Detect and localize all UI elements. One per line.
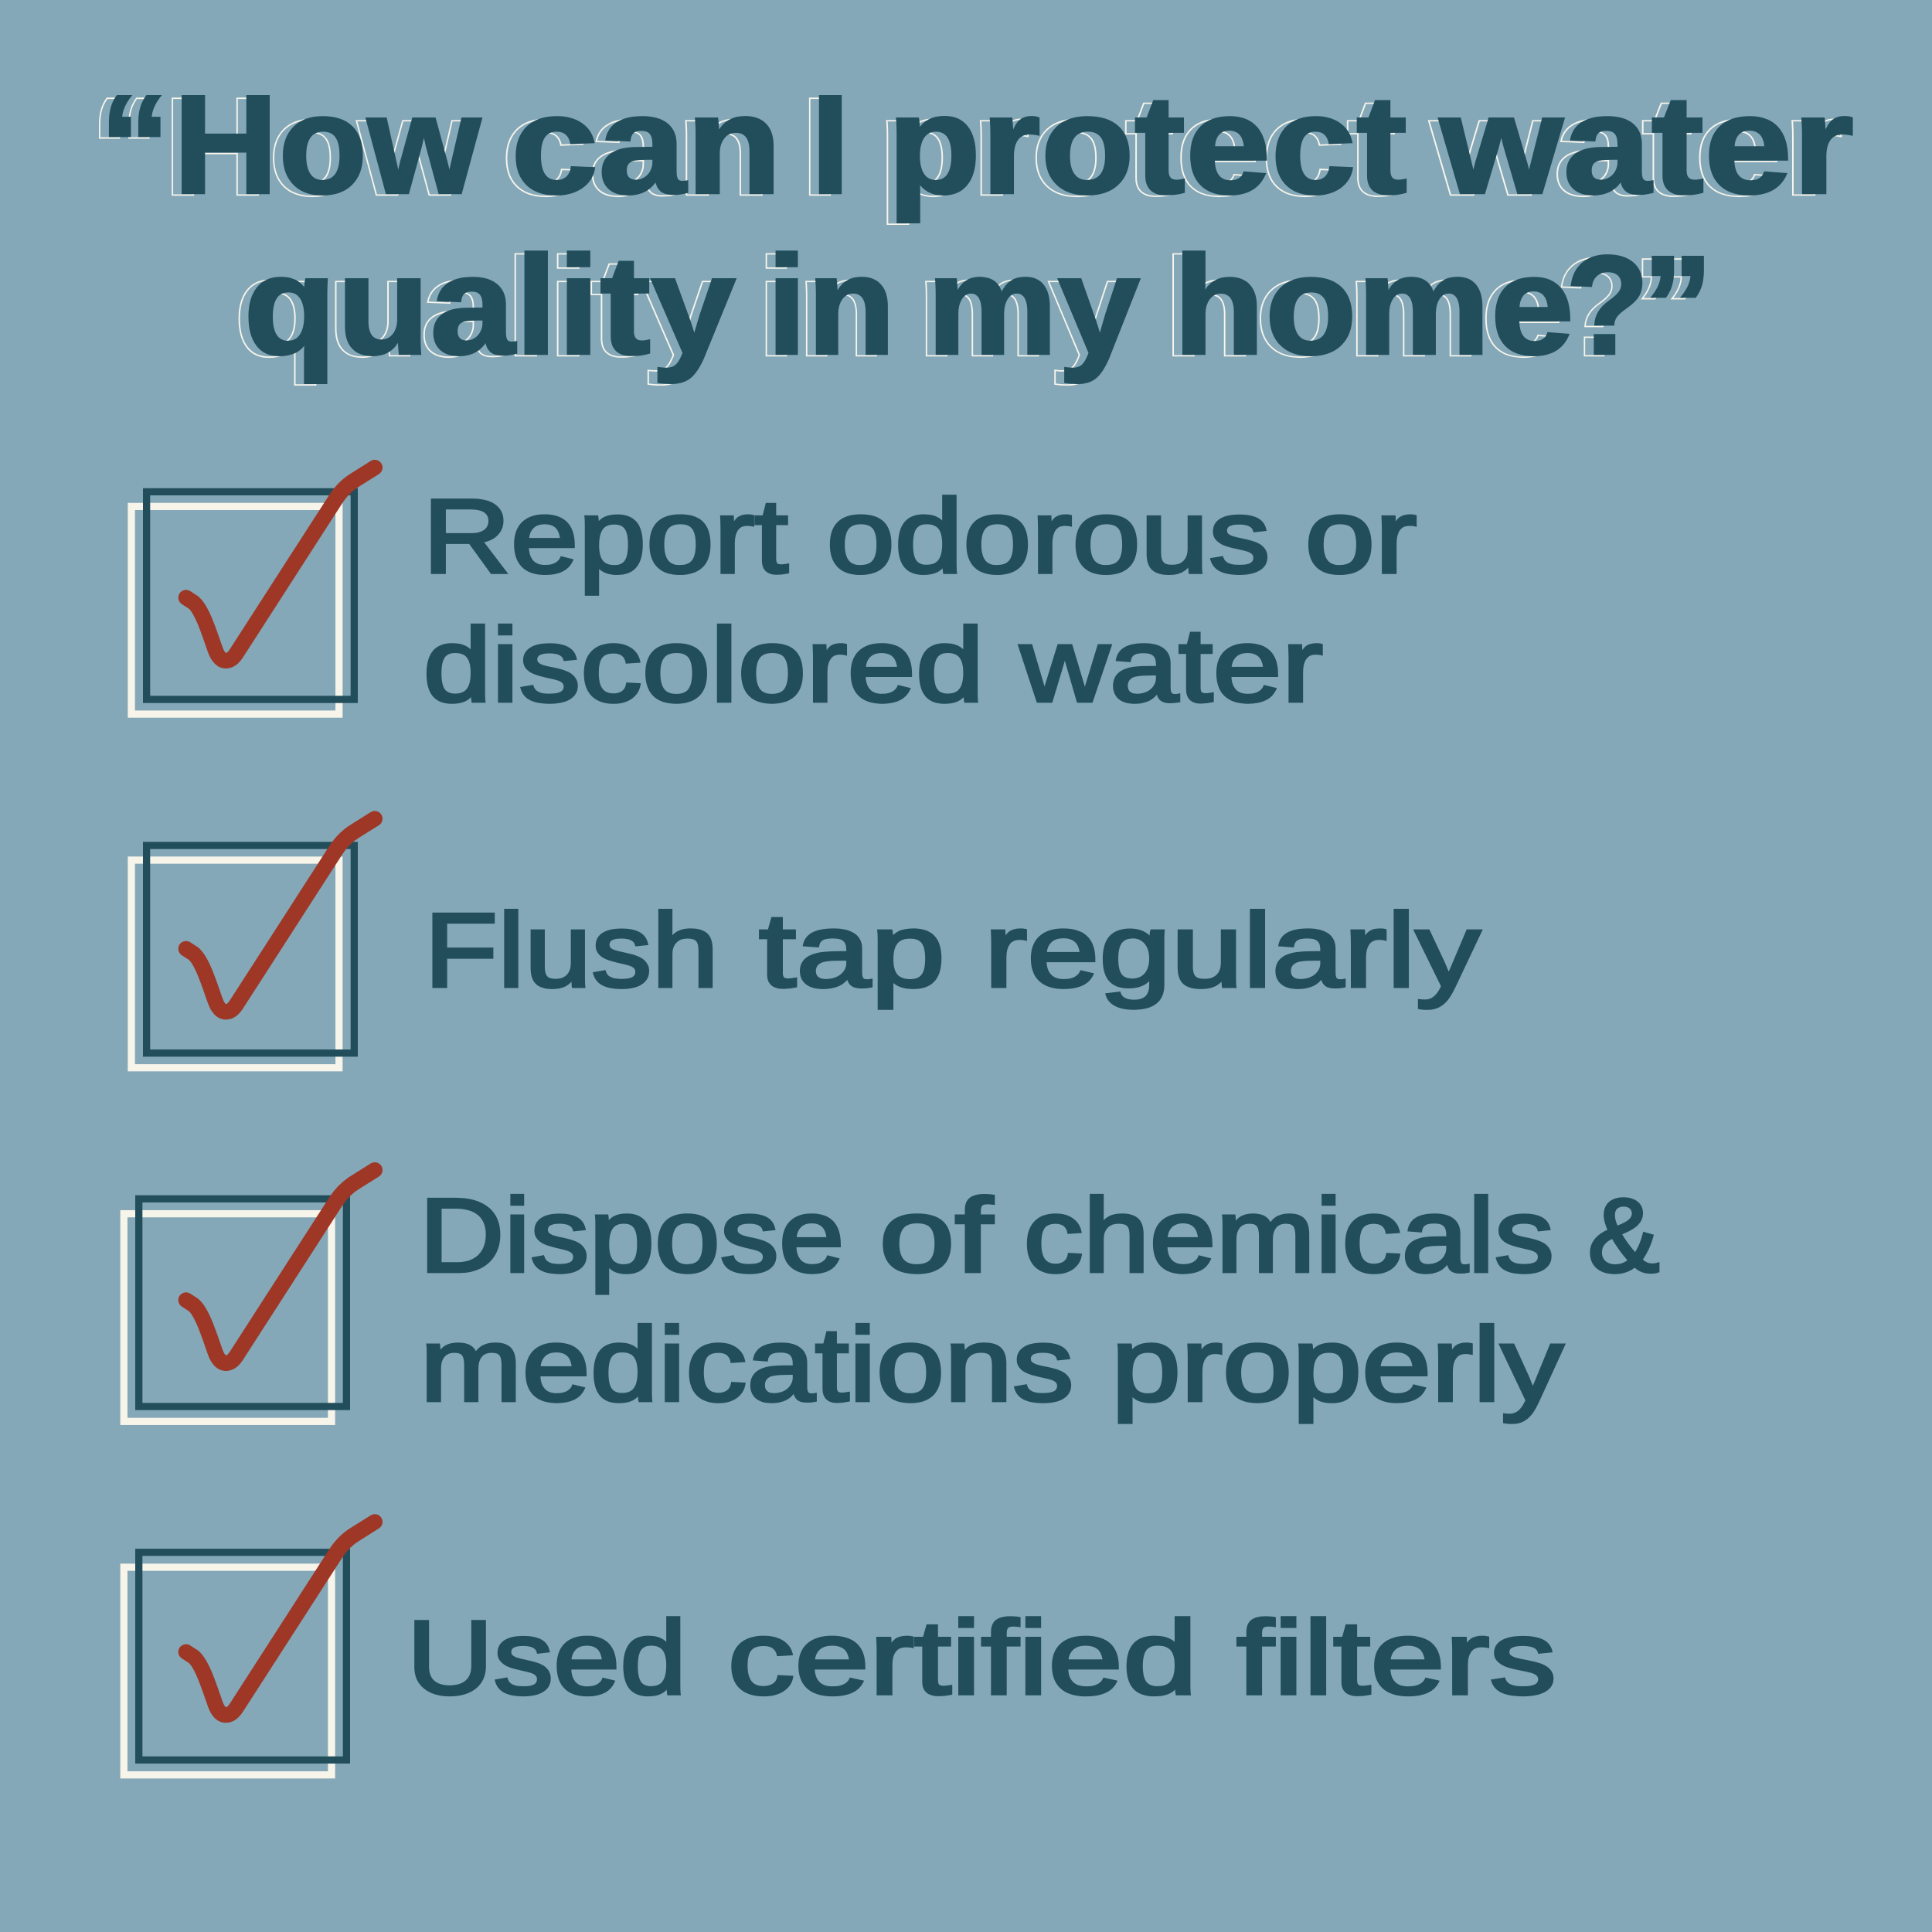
title solid text: How: [173, 66, 481, 223]
title outline offset layer: I: [801, 67, 839, 225]
text: used certified filters: filters: [1236, 1599, 1556, 1716]
title outline offset layer: ?: [1555, 228, 1638, 386]
checklist item 3: [124, 1170, 1659, 1423]
title: [90, 66, 1854, 386]
checklist item 4: [124, 1522, 1556, 1775]
text: report odorous or discolored water: or: [1304, 478, 1417, 595]
title outline offset layer: quality: [233, 228, 725, 386]
text: dispose of chemicals and medications properly: medications: [420, 1305, 1074, 1423]
text: used certified filters: Used: [406, 1599, 686, 1716]
title outline offset layer: home: [1162, 228, 1564, 386]
text: flush tap regularly: [424, 892, 1481, 1009]
text: dispose of chemicals and medications properly: Dispose: [419, 1176, 844, 1294]
text: dispose of chemicals and medications properly: [419, 1176, 1660, 1423]
icon: checkbox with check mark 1: [131, 468, 375, 714]
icon: checkbox with check mark 4: [124, 1522, 375, 1775]
text: report odorous or discolored water: [423, 478, 1417, 723]
text: used certified filters: certified: [728, 1599, 1198, 1716]
text: used certified filters: [406, 1599, 1556, 1716]
title solid text: protect: [887, 66, 1407, 223]
text: dispose of chemicals and medications properly: &: [1587, 1176, 1660, 1294]
title solid text: in: [767, 226, 896, 384]
text: flush tap regularly: Flush: [424, 892, 719, 1009]
checklist item 2: [131, 818, 1481, 1068]
text: report odorous or discolored water: odorous: [827, 478, 1270, 595]
title outline offset layer: water: [1428, 67, 1844, 225]
text: flush tap regularly: tap: [759, 892, 945, 1009]
title solid text: ?: [1566, 226, 1649, 384]
title outline offset layer: [90, 67, 1844, 386]
title outline offset layer: my: [917, 228, 1130, 386]
title solid text: [100, 66, 1854, 384]
title outline offset layer: can: [501, 67, 771, 225]
text: report odorous or discolored water: Report: [423, 478, 788, 595]
text: report odorous or discolored water: water: [1019, 606, 1323, 723]
title solid text: can: [511, 66, 782, 223]
title solid text: water: [1439, 66, 1854, 223]
title outline offset layer: protect: [876, 67, 1397, 225]
title solid text: quality: [243, 226, 736, 384]
title solid text: home: [1173, 226, 1574, 384]
title outline offset layer: in: [756, 228, 886, 386]
checklist item 1: [131, 468, 1417, 723]
title outline offset layer: “: [90, 67, 159, 225]
icon: checkbox with check mark 3: [124, 1170, 375, 1421]
title outline offset layer: How: [162, 67, 471, 225]
text: dispose of chemicals and medications properly: properly: [1111, 1305, 1563, 1423]
title solid text: “: [100, 66, 170, 223]
text: dispose of chemicals and medications properly: chemicals: [1023, 1176, 1554, 1294]
text: flush tap regularly: regularly: [985, 892, 1481, 1009]
title solid text: my: [927, 226, 1140, 384]
title outline offset layer: ”: [1632, 228, 1703, 386]
text: dispose of chemicals and medications properly: of: [879, 1176, 993, 1294]
text: report odorous or discolored water: discolored: [423, 606, 985, 723]
title solid text: I: [811, 66, 850, 223]
title solid text: ”: [1642, 226, 1713, 384]
icon: checkbox with check mark 2: [131, 818, 375, 1068]
